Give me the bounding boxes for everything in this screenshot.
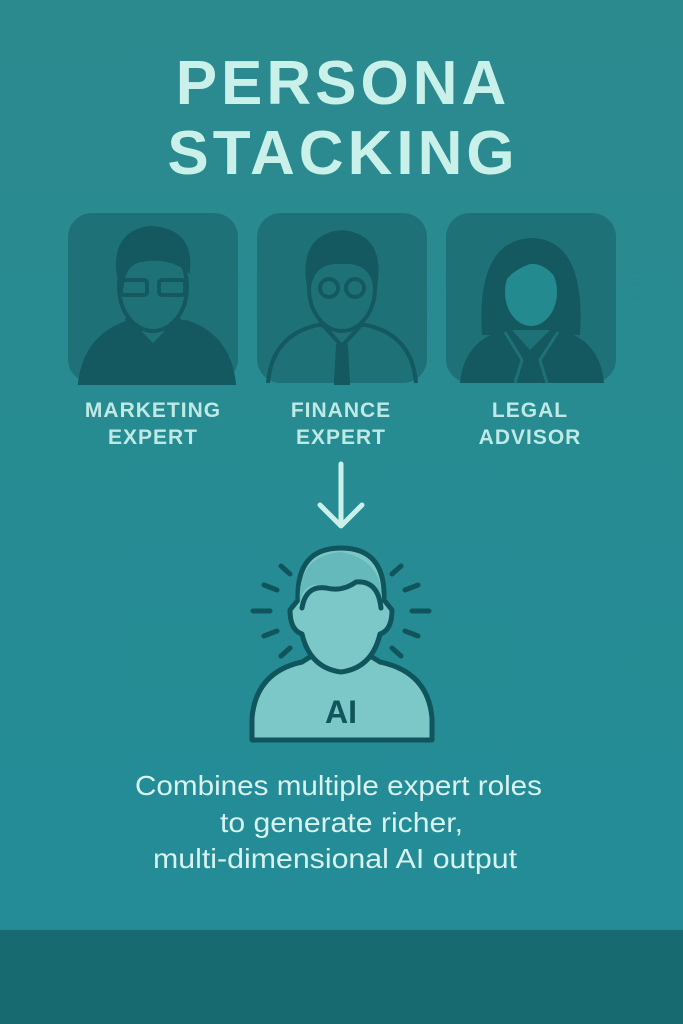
arrow bbox=[320, 464, 362, 526]
title: PERSONA bbox=[176, 49, 510, 118]
labels: MARKETING bbox=[85, 399, 221, 422]
description bbox=[135, 770, 542, 874]
labels: LEGAL bbox=[492, 399, 568, 422]
icon: legal advisor person bbox=[460, 238, 604, 383]
icon: finance expert person bbox=[268, 232, 416, 383]
description: multi-dimensional AI output bbox=[153, 843, 517, 874]
labels bbox=[85, 399, 581, 449]
labels: ADVISOR bbox=[479, 426, 581, 449]
panel: finance expert bbox=[257, 213, 427, 383]
icon: AI person bbox=[252, 548, 432, 740]
title bbox=[167, 49, 519, 188]
panel: marketing expert bbox=[68, 213, 238, 383]
labels: FINANCE bbox=[291, 399, 391, 422]
labels: EXPERT bbox=[108, 426, 198, 449]
AI label: AI bbox=[325, 694, 357, 730]
title: STACKING bbox=[167, 119, 519, 188]
labels: EXPERT bbox=[296, 426, 386, 449]
panel: legal advisor bbox=[446, 213, 616, 383]
description: Combines multiple expert roles bbox=[135, 770, 542, 801]
description: to generate richer, bbox=[220, 807, 463, 838]
icon: marketing expert person bbox=[80, 228, 234, 383]
